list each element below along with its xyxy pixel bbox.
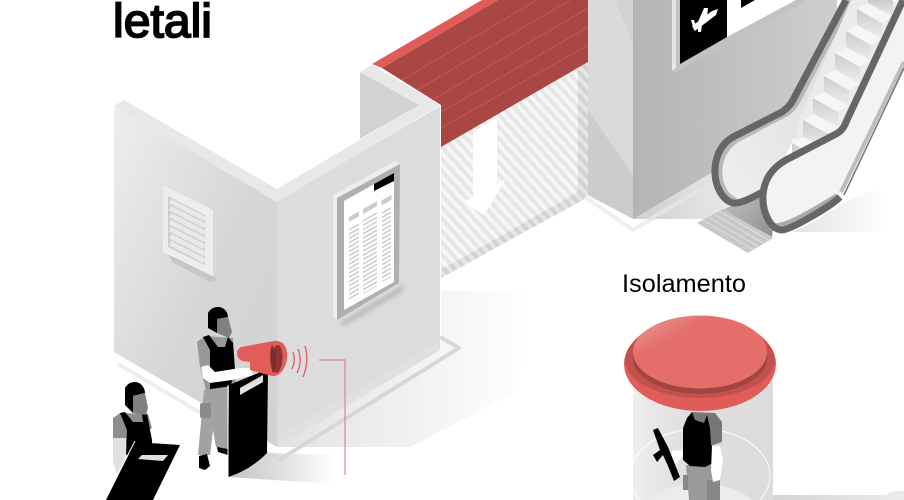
left wall bbox=[114, 106, 277, 447]
arm bbox=[113, 438, 126, 478]
icon: floor mat bbox=[697, 190, 773, 253]
pouch bbox=[200, 403, 211, 418]
shutter body bbox=[382, 0, 588, 147]
boots bbox=[199, 454, 210, 470]
hand bbox=[669, 450, 683, 464]
left balustrade bbox=[715, 0, 860, 203]
figure: guard with shield bbox=[106, 382, 180, 500]
pouches bbox=[707, 480, 720, 500]
floor disc bbox=[648, 483, 752, 500]
panel: isolation cylinder bbox=[624, 316, 904, 500]
stairs bbox=[790, 0, 904, 158]
hair bbox=[208, 307, 228, 333]
shirt bbox=[197, 336, 236, 390]
legs bbox=[198, 386, 232, 455]
sign: departures bbox=[672, 0, 806, 72]
vest bbox=[683, 412, 715, 467]
vest bbox=[120, 412, 152, 455]
heading: Isolamento: Isolamento bbox=[622, 270, 746, 298]
wall top cap bbox=[114, 65, 440, 202]
floor strip bbox=[773, 491, 904, 500]
paper sheet bbox=[344, 173, 394, 310]
poster: timetable bbox=[333, 161, 403, 326]
shirt bbox=[685, 412, 722, 446]
shirt bbox=[113, 413, 152, 445]
floor shadow bbox=[633, 160, 745, 219]
figure: guard with megaphone bbox=[197, 307, 335, 484]
panel: escalator bbox=[715, 0, 904, 231]
icon: megaphone bbox=[237, 341, 287, 376]
pale floor band bbox=[585, 183, 715, 230]
icon: rifle bbox=[653, 428, 680, 481]
shield shadow bbox=[228, 453, 335, 484]
icon: airplane bbox=[691, 8, 718, 32]
floor shadows bbox=[118, 291, 530, 460]
wall base strip bbox=[277, 341, 440, 447]
red cap rim bbox=[624, 317, 776, 411]
red cap top bbox=[633, 316, 767, 388]
shield label bbox=[240, 375, 263, 395]
floor ring bbox=[630, 429, 770, 500]
band on floor shadow bbox=[650, 181, 716, 219]
black header bbox=[374, 173, 394, 191]
shutter top edge bbox=[372, 0, 498, 68]
callout line bbox=[319, 360, 345, 475]
vest bbox=[203, 335, 235, 390]
shield label bbox=[138, 455, 168, 461]
hair bbox=[125, 382, 145, 413]
panel: building column bbox=[585, 0, 837, 230]
icon: down arrow bbox=[464, 117, 506, 215]
left face bbox=[588, 0, 633, 219]
hatched opening bbox=[441, 62, 588, 278]
glass tube bbox=[633, 370, 773, 500]
table rows bbox=[354, 196, 386, 299]
panel: corner wall bbox=[114, 65, 440, 447]
shield bbox=[106, 442, 180, 500]
back wall segment bbox=[360, 72, 419, 139]
face bbox=[133, 393, 148, 415]
icon: ventilation grille bbox=[163, 185, 217, 282]
red cap band bbox=[625, 322, 775, 398]
right wall bbox=[277, 106, 440, 447]
red cap shadow bbox=[632, 320, 768, 394]
arm bbox=[201, 365, 253, 383]
sound waves bbox=[292, 346, 307, 377]
band over wall base bbox=[279, 337, 459, 460]
arm bbox=[711, 446, 723, 482]
escalator shadow bbox=[792, 190, 885, 232]
figure: guard in cylinder bbox=[653, 412, 723, 500]
shield bbox=[228, 369, 268, 477]
right balustrade bbox=[762, 0, 904, 231]
face bbox=[217, 317, 232, 338]
panel: red shutter bbox=[372, 0, 588, 278]
right face bbox=[633, 0, 837, 219]
pants bbox=[686, 464, 715, 500]
